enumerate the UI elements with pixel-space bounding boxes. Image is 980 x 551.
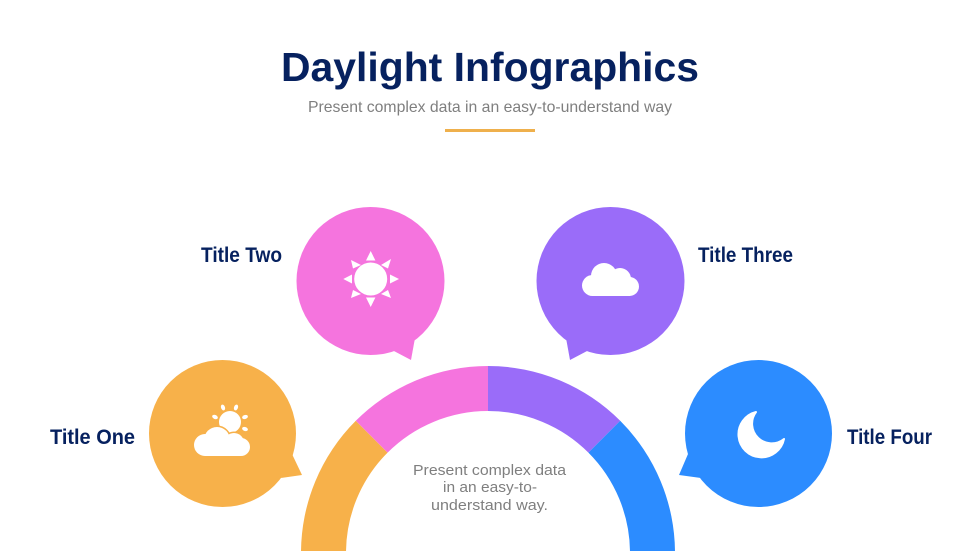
speech bubble: orange xyxy=(149,360,302,507)
speech bubble: pink xyxy=(296,207,444,360)
center text: in an easy-to- xyxy=(443,479,537,496)
ring segment: blue xyxy=(588,421,675,551)
label: Title One: Title One xyxy=(50,426,135,449)
label: Title Two: Title Two xyxy=(201,244,282,267)
label: Title Three: Title Three xyxy=(698,244,793,267)
ring segment: orange xyxy=(301,421,388,551)
icon: crescent moon xyxy=(738,412,784,457)
icon: cloud xyxy=(582,263,639,296)
icon: sun xyxy=(343,251,399,307)
speech bubble: purple xyxy=(536,207,684,360)
center text: understand way. xyxy=(431,497,548,514)
icon: sun behind cloud xyxy=(194,404,250,456)
accent underline xyxy=(445,129,535,132)
ring segment: pink xyxy=(356,366,488,453)
speech bubble: blue xyxy=(679,360,832,507)
center text: Present complex data xyxy=(413,462,567,479)
subtitle: Present complex data in an easy-to-understand way xyxy=(308,99,672,116)
title: Daylight Infographics xyxy=(281,44,699,90)
ring segment: purple xyxy=(488,366,620,453)
label: Title Four: Title Four xyxy=(847,426,932,449)
semicircle ring chart xyxy=(301,366,675,551)
center text xyxy=(413,462,567,514)
